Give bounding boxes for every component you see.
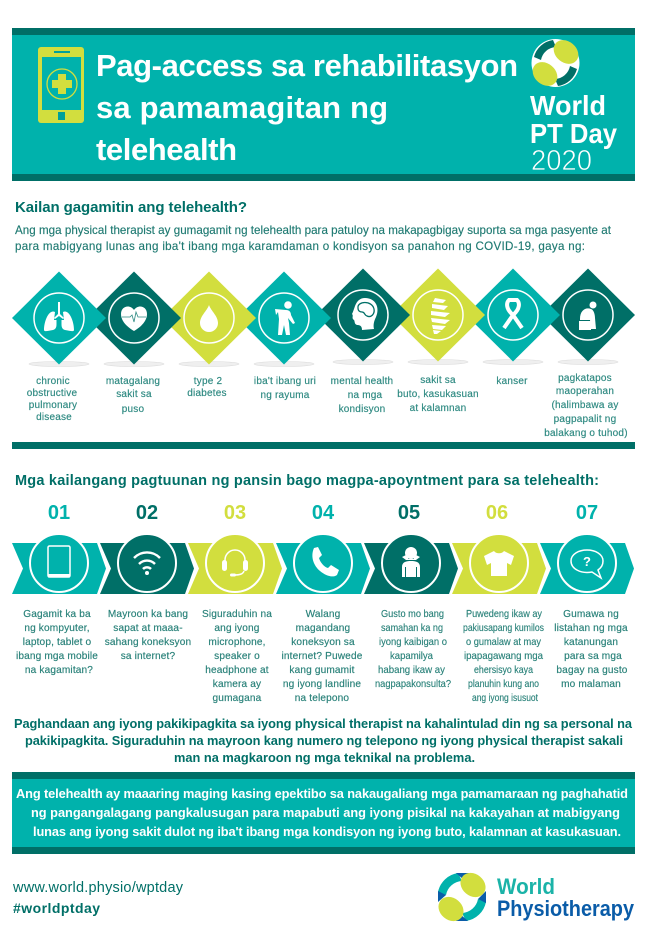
text: step 1: ng kompyuter, [24,623,90,634]
text: step 7: katanungan [564,637,618,648]
step numbers: 03 [224,502,246,524]
heading: when to use telehealth: Kailan gagamitin ang telehealth? [15,199,247,216]
text: step 3: Siguraduhin na [202,609,272,620]
conclusion band [12,772,635,854]
preparation paragraph: man na magkaroon ng mga teknikal na problema. [174,750,475,765]
text: step 6: ehersisyo kaya [474,665,533,676]
label: after surgery: pagkatapos [558,373,612,384]
step 5: person [364,534,458,594]
label: heart disease: puso [122,404,144,415]
diamond: bone, joint and muscle pain [391,268,485,364]
label: COPD: obstructive [27,388,78,399]
icon: smartphone with medical cross [38,47,84,123]
text: step 3: gumagana [213,693,262,704]
text: step 5: habang ikaw ay [378,665,446,676]
chevron process row [12,534,634,594]
logo: World Physiotherapy: Physiotherapy [497,896,635,921]
text: step 6 [463,609,544,704]
text: step 4: na telepono [295,693,349,704]
label: heart disease: matagalang [106,376,160,387]
logo: World PT Day 2020: World [530,90,606,121]
label: heart disease: sakit sa [116,389,152,400]
text: step 1: laptop, tablet o [23,637,92,648]
conclusion text: Ang telehealth ay maaaring maging kasing epektibo sa nakaugaliang mga pamamaraan ng paghahatid [16,786,628,801]
label: COPD: disease [36,412,72,423]
label: arthritis: iba't ibang uri [254,376,316,387]
text: step 2: sahang koneksyon [105,637,191,648]
text: step 3: microphone, [208,637,266,648]
step numbers [48,502,598,524]
step descriptions [16,609,628,704]
text: step 4: kang gumamit [289,665,355,676]
logo: World Physiotherapy: World [497,874,555,899]
text: step 3: kamera ay [213,679,262,690]
text: step 4: Walang [306,609,340,620]
label: cancer: kanser [496,376,528,387]
text: step 1: Gagamit ka ba [23,609,91,620]
label: after surgery: maoperahan [556,386,614,397]
preparation paragraph: Paghandaan ang iyong pakikipagkita sa iyong physical therapist na kahalintulad din ng sa personal na [14,716,633,731]
diamond: mental health [316,268,410,364]
step numbers: 05 [398,502,420,524]
text: step 5: samahan ka ng [381,623,443,634]
text: step 6: o gumalaw at may [466,637,542,648]
label: after surgery: balakang o tuhod) [544,428,628,439]
label: bones and muscles: at kalamnan [410,403,466,414]
text: step 3: speaker o [214,651,260,662]
diamond: arthritis [237,272,331,366]
header banner [12,28,635,181]
preparation paragraph [14,716,633,765]
heading: things to consider: Mga kailangang pagtuunan ng pansin bago magpa-apoyntment para sa telehealth: [15,473,599,489]
footer website: www.world.physio/wptday [12,880,184,896]
step 7: speech bubble with question mark: ? [583,554,591,569]
diamond: lungs [12,272,106,366]
diamond: cancer [466,268,560,364]
intro paragraph: para mabigyang lunas ang iba't ibang mga karamdaman o kondisyon sa panahon ng COVID-19, gaya ng: [15,240,585,253]
text: step 7: listahan ng mga [554,623,628,634]
label: bones and muscles: buto, kasukasuan [397,389,479,400]
label: COPD: chronic [36,376,70,387]
label: after surgery: (halimbawa ay [551,400,619,411]
label: arthritis: ng rayuma [260,390,310,401]
text: step 4: ng iyong landline [283,679,361,690]
text: step 2: Mayroon ka bang [108,609,188,620]
step 6: t-shirt [452,534,546,594]
intro paragraph: Ang mga physical therapist ay gumagamit ng telehealth para patuloy na makapagbigay suporta sa mga pasyente at [15,224,612,237]
label: mental health: mental health [331,376,393,387]
text: step 4: koneksyon sa [291,637,355,648]
text: step 5 [375,609,451,690]
step numbers: 07 [576,502,598,524]
text: step 5: Gusto mo bang [381,609,444,620]
label: diabetes: diabetes [187,388,227,399]
text: step 6: Puwedeng ikaw ay [466,609,543,620]
text: step 6: ang iyong isusuot [472,693,538,704]
footer hashtag: #worldptday [13,900,100,916]
text: step 6: planuhin kung ano [468,679,539,690]
text: step 7: bagay na gusto [556,665,628,676]
text: step 7: mo malaman [561,679,621,690]
diamond: post surgery [541,268,635,364]
step numbers: 01 [48,502,70,524]
step 7: speech bubble with question mark [540,534,634,594]
intro paragraph [15,224,612,253]
text: step 5: kapamilya [390,651,433,662]
title: sa pamamagitan ng [96,90,388,125]
conditions row [12,268,635,366]
conclusion text: ng pangangalagang pangkalusugan para mapabuti ang iyong pisikal na kakayahan at mabigyang [31,805,620,820]
label: diabetes: type 2 [194,376,222,387]
step 3: headset [188,534,282,594]
step 4: telephone [276,534,370,594]
text: step 2: sa internet? [121,651,176,662]
text: step 1: ibang mga mobile [16,651,98,662]
title [96,48,518,167]
logo: World PT Day 2020: 2020 [531,145,592,177]
text: step 4: internet? Puwede [282,651,363,662]
conclusion text: lunas ang iyong sakit dulot ng iba't ibang mga kondisyon ng iyong buto, kalamnan at kasukasuan. [33,824,621,839]
text: step 6: ipapagawang mga [464,651,543,662]
diamond: diabetes [162,272,256,366]
text: step 5: nagpapakonsulta? [375,679,451,690]
text: step 4: magandang [296,623,350,634]
logo: World PT Day 2020 [528,35,617,177]
text: step 3: ang iyong [214,623,260,634]
text: step 2: sapat at maaa- [113,623,183,634]
label: after surgery: pagpapalit ng [554,414,616,425]
text: step 6: pakiusapang kumilos [463,623,544,634]
label: mental health: na mga [348,390,383,401]
logo: World PT Day 2020: PT Day [530,118,617,149]
label: bones and muscles: sakit sa [420,375,456,386]
label: COPD: pulmonary [29,400,77,411]
text: step 1: na kagamitan? [25,665,93,676]
text: step 5: iyong kaibigan o [379,637,447,648]
text: step 7: para sa mga [564,651,622,662]
step numbers: 06 [486,502,508,524]
step 2: wifi [100,534,194,594]
logo: World Physiotherapy [434,868,635,926]
step numbers: 02 [136,502,158,524]
title: telehealth [96,132,237,167]
text: step 7: Gumawa ng [563,609,619,620]
step 1: tablet [12,534,106,594]
preparation paragraph: pakikipagkita. Siguraduhin na mayroon kang numero ng telepono ng iyong physical therapist sakali [25,733,623,748]
label: mental health: kondisyon [339,404,385,415]
condition labels [27,373,628,439]
text: step 3: headphone at [205,665,269,676]
title: Pag-access sa rehabilitasyon [96,48,518,83]
conclusion text [16,786,628,839]
step numbers: 04 [312,502,335,524]
diamond: heart disease [87,272,181,366]
